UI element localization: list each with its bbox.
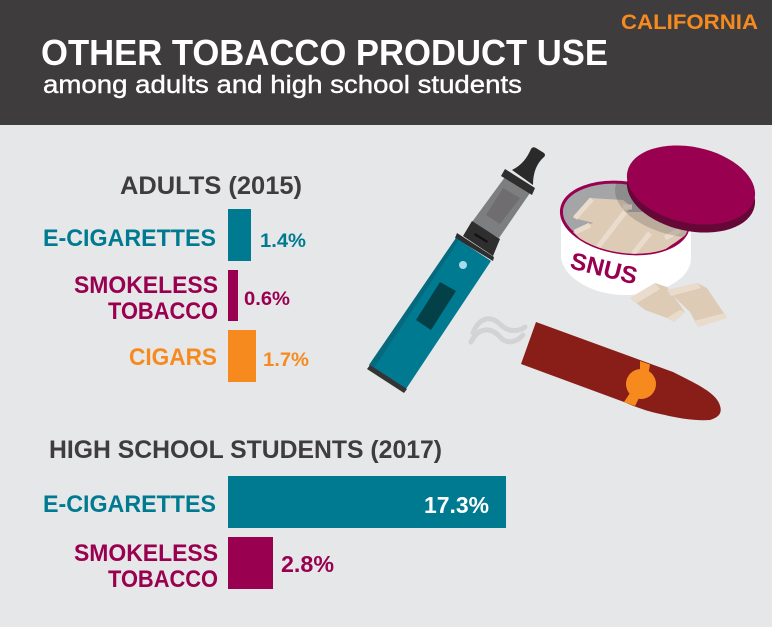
row: students e-cigarettes: E-CIGARETTES: [43, 491, 216, 518]
bottom collar: [463, 221, 500, 256]
row: adults smokeless tobacco: 0.6%: [244, 288, 290, 310]
row: students e-cigarettes: [43, 476, 506, 528]
row: adults e-cigarettes: [43, 209, 306, 261]
row: adults e-cigarettes: 1.4%: [260, 230, 306, 252]
display: [416, 282, 456, 330]
row: adults cigars: 1.7%: [263, 349, 309, 371]
high school bar chart: [43, 476, 506, 593]
mouthpiece: [512, 147, 545, 185]
cigar body: [521, 322, 721, 420]
state label: CALIFORNIA: [621, 10, 758, 34]
tank: [472, 177, 530, 238]
row: students smokeless tobacco: [74, 537, 334, 593]
heading: adults: ADULTS (2015): [120, 172, 302, 200]
row: students smokeless tobacco: 2.8%: [281, 551, 334, 577]
icon: cigar: [471, 319, 721, 420]
row: adults smokeless tobacco: TOBACCO: [108, 298, 218, 325]
battery body: [369, 238, 491, 389]
tin opening: [557, 174, 693, 262]
icon: snus tin: [560, 146, 756, 327]
lid shadow: [615, 182, 687, 237]
row: adults smokeless tobacco: SMOKELESS: [74, 272, 218, 299]
pouches inside tin: [573, 182, 688, 254]
row: students smokeless tobacco: TOBACCO: [108, 566, 218, 593]
tin wall: [561, 220, 691, 295]
base: [367, 365, 407, 393]
header band: [0, 0, 772, 125]
SNUS label: SNUS: [568, 248, 640, 290]
subtitle: among adults and high school students: [43, 71, 522, 99]
lid side: [620, 142, 762, 244]
row: adults smokeless tobacco: [74, 270, 290, 325]
row: adults cigars: [129, 330, 309, 382]
row: adults cigars: CIGARS: [129, 344, 217, 371]
loose pouches: [630, 283, 727, 327]
row: adults e-cigarettes: E-CIGARETTES: [43, 225, 216, 252]
indicator dot: [459, 261, 467, 269]
row: students e-cigarettes: 17.3%: [424, 492, 489, 518]
title: OTHER TOBACCO PRODUCT USE: [41, 32, 608, 73]
cigar band: [624, 361, 656, 406]
adults bar chart: [43, 209, 309, 382]
top collar: [501, 169, 535, 195]
lid top: [620, 134, 762, 236]
row: students smokeless tobacco: SMOKELESS: [74, 540, 218, 567]
icon: vape pen: [367, 147, 545, 393]
smoke: [471, 319, 525, 342]
heading: high school students: HIGH SCHOOL STUDENTS (2017): [49, 436, 442, 464]
